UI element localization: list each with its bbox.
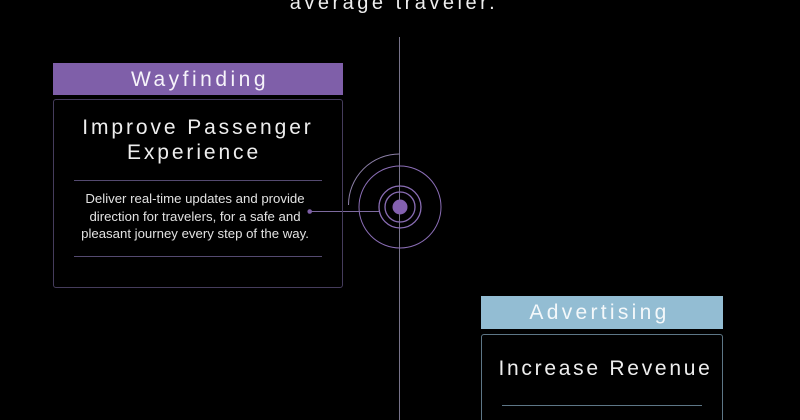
advertising label: Advertising	[529, 301, 670, 324]
top divider	[74, 180, 322, 181]
connector line with dot	[307, 209, 379, 214]
advertising header bar	[481, 296, 723, 329]
wayfinding label: Wayfinding	[131, 68, 269, 91]
wayfinding description	[81, 191, 309, 241]
wayfinding card title: Experience	[127, 141, 261, 164]
panel: wayfinding	[53, 63, 343, 288]
wayfinding description: pleasant journey every step of the way.	[81, 226, 309, 241]
wayfinding card title: Improve Passenger	[82, 116, 314, 139]
advertising card outline	[481, 334, 723, 420]
advertising divider	[502, 405, 702, 406]
wayfinding description: direction for travelers, for a safe and	[89, 208, 301, 224]
wayfinding card outline	[53, 99, 343, 288]
panel: advertising	[481, 296, 723, 420]
advertising card title: Increase Revenue	[498, 357, 713, 380]
wayfinding card title	[82, 116, 314, 164]
icon: target rings	[348, 154, 441, 248]
bottom divider	[74, 256, 322, 257]
wayfinding header bar	[53, 63, 343, 95]
wayfinding description: Deliver real-time updates and provide	[85, 191, 305, 206]
timeline axis	[398, 37, 400, 420]
